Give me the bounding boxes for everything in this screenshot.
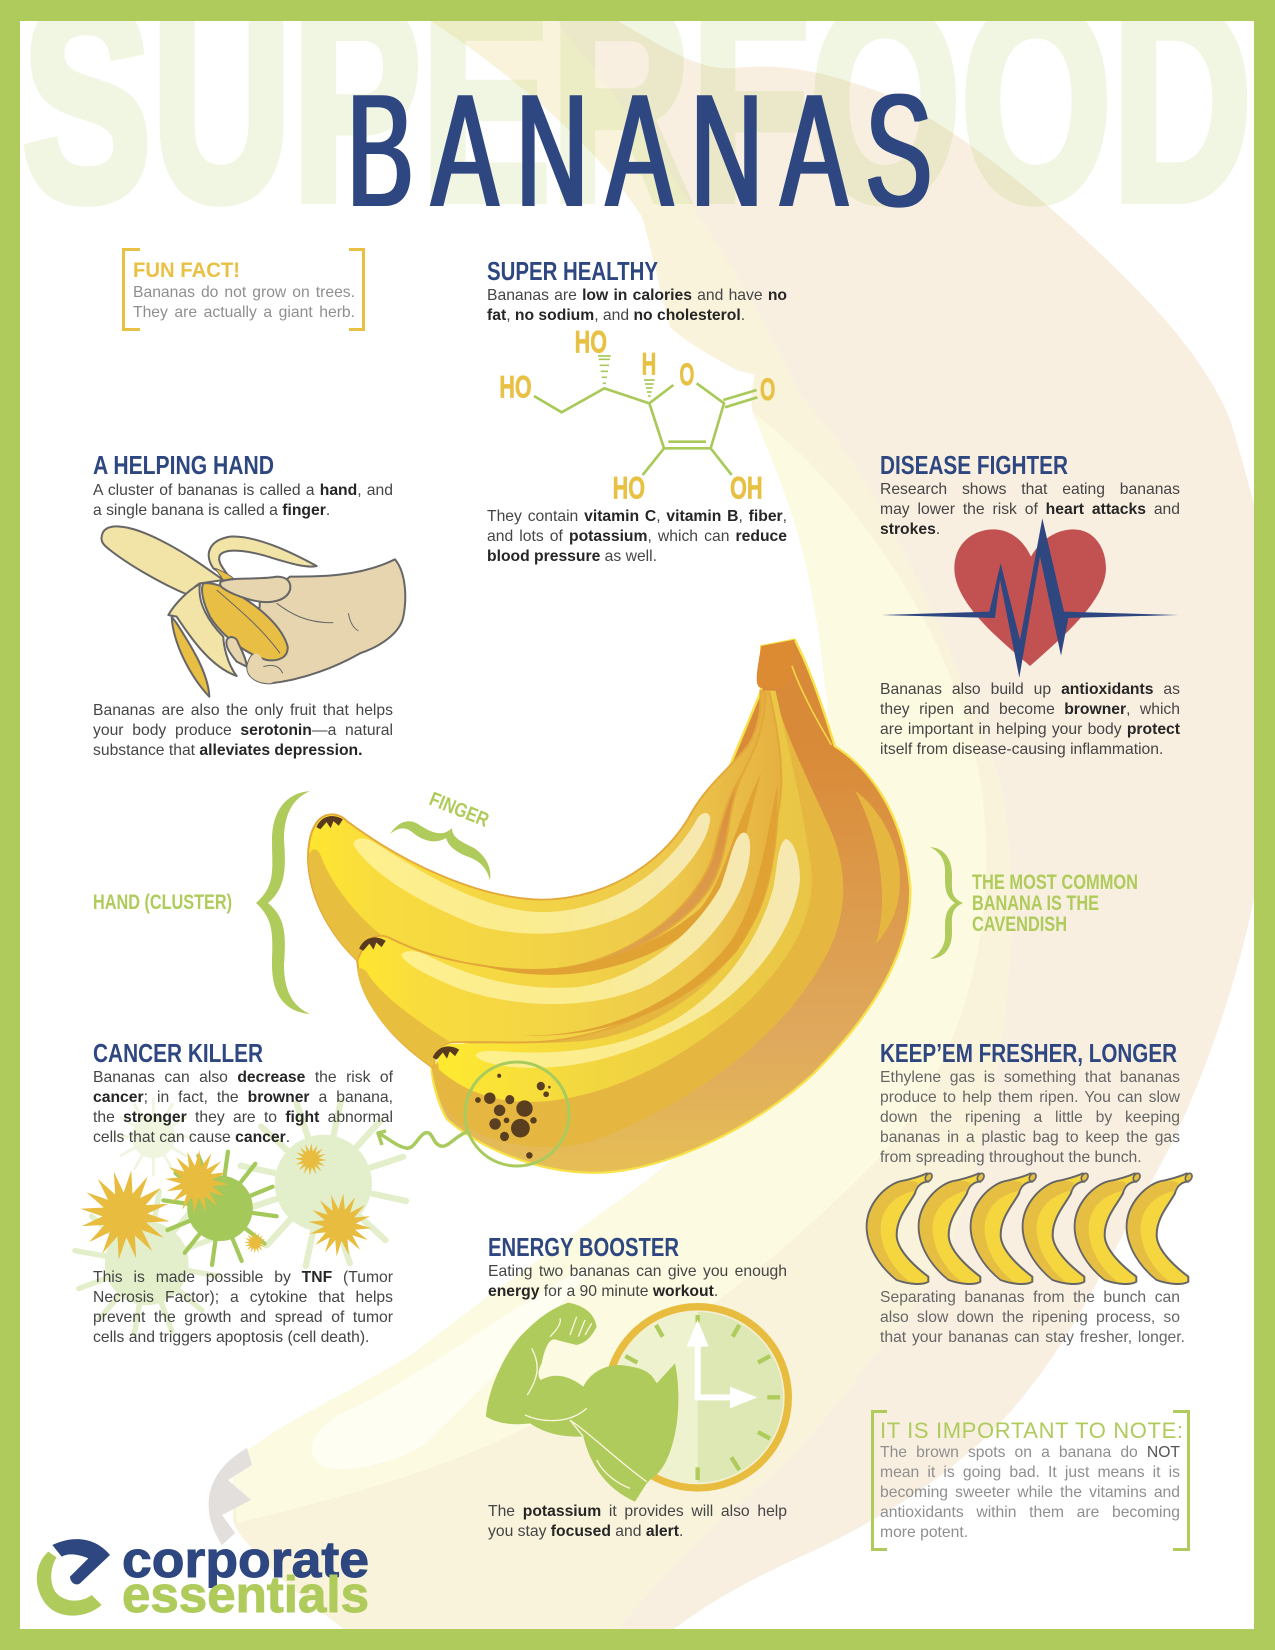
panel: keep'em fresher, longer: produce to help them ripen. You can slow xyxy=(880,1089,1180,1106)
logo: corporate essentials: essentials xyxy=(122,1566,369,1623)
panel: cancer killer xyxy=(72,1038,410,1346)
panel: disease fighter xyxy=(880,450,1180,758)
label: finger xyxy=(390,790,492,880)
panel: energy booster: The potassium it provides will also help xyxy=(488,1503,787,1520)
icon: flexed arm and clock xyxy=(486,1303,788,1502)
panel: fun fact xyxy=(122,248,365,331)
panel: keep'em fresher, longer: from spreading throughout the bunch. xyxy=(880,1149,1142,1166)
panel: energy booster: you stay focused and alert. xyxy=(488,1523,683,1540)
panel: super healthy: They contain vitamin C, vitamin B, fiber, xyxy=(487,508,787,525)
chemical structure: vitamin C: O xyxy=(760,371,775,407)
panel: keep'em fresher, longer: Separating bananas from the bunch can xyxy=(880,1289,1180,1306)
label: cavendish: CAVENDISH xyxy=(972,913,1067,936)
panel: keep'em fresher, longer: KEEP’EM FRESHER, LONGER xyxy=(880,1038,1177,1068)
panel: disease fighter: Research shows that eating bananas xyxy=(880,481,1180,498)
panel: disease fighter: strokes. xyxy=(880,521,940,538)
panel: a helping hand: substance that alleviates depression. xyxy=(93,742,362,759)
chemical structure: vitamin C xyxy=(499,323,775,505)
panel: important note xyxy=(871,1410,1190,1551)
panel: cancer killer: Bananas can also decrease the risk of xyxy=(93,1069,393,1086)
panel: cancer killer: This is made possible by TNF (Tumor xyxy=(93,1269,393,1286)
panel: keep'em fresher, longer xyxy=(866,1038,1193,1346)
panel: cancer killer: cells and triggers apoptosis (cell death). xyxy=(93,1329,369,1346)
panel: energy booster: ENERGY BOOSTER xyxy=(488,1232,679,1262)
panel: cancer killer: Necrosis Factor); a cytokine that helps xyxy=(93,1289,393,1306)
panel: a helping hand: Bananas are also the only fruit that helps xyxy=(93,702,393,719)
callout: brown spot magnifier with arrow xyxy=(376,1060,570,1168)
panel: important note: mean it is going bad. It just means it is xyxy=(880,1464,1180,1481)
panel: keep'em fresher, longer: down the ripening a little by keeping xyxy=(880,1109,1180,1126)
panel: fun fact: Bananas do not grow on trees. xyxy=(133,284,355,301)
panel: energy booster: energy for a 90 minute workout. xyxy=(488,1283,718,1300)
panel: energy booster: Eating two bananas can give you enough xyxy=(488,1263,787,1280)
chemical structure: vitamin C: OH xyxy=(730,469,763,505)
chemical structure: vitamin C: HO xyxy=(575,323,607,359)
panel: important note: The brown spots on a banana do NOT xyxy=(880,1444,1180,1461)
chemical structure: vitamin C: HO xyxy=(613,469,645,505)
chemical structure: vitamin C: HO xyxy=(499,368,532,404)
panel: super healthy: SUPER HEALTHY xyxy=(487,256,658,286)
logo: corporate essentials xyxy=(36,1531,369,1623)
panel: disease fighter: may lower the risk of heart attacks and xyxy=(880,501,1180,518)
panel: super healthy: and lots of potassium, which can reduce xyxy=(487,528,787,545)
main banana bunch illustration xyxy=(307,638,912,1174)
panel: energy booster xyxy=(486,1232,792,1540)
panel: cancer killer: CANCER KILLER xyxy=(93,1038,263,1068)
panel: a helping hand: a single banana is called a finger. xyxy=(93,502,330,519)
panel: cancer killer: cancer; in fact, the browner a banana, xyxy=(93,1089,393,1106)
panel: disease fighter: are important in helping your body protect xyxy=(880,721,1180,738)
panel: keep'em fresher, longer: that your bananas can stay fresher, longer. xyxy=(880,1329,1185,1346)
panel: important note: IT IS IMPORTANT TO NOTE: xyxy=(880,1418,1183,1443)
panel: disease fighter: they ripen and become browner, which xyxy=(880,701,1180,718)
icon: heart with heartbeat line xyxy=(882,518,1178,678)
panel: fun fact: FUN FACT! xyxy=(133,259,240,282)
panel: super healthy: fat, no sodium, and no cholesterol. xyxy=(487,307,745,324)
chemical structure: vitamin C: H xyxy=(642,345,656,381)
icon: row of six bananas xyxy=(867,1172,1193,1284)
panel: a helping hand: A cluster of bananas is called a hand, and xyxy=(93,482,393,499)
panel: super healthy: Bananas are low in calories and have no xyxy=(487,287,787,304)
panel: super healthy xyxy=(487,256,787,565)
label: cavendish: BANANA IS THE xyxy=(972,892,1099,915)
panel: a helping hand: A HELPING HAND xyxy=(93,450,274,480)
label: hand cluster: HAND (CLUSTER) xyxy=(93,891,232,914)
panel: super healthy: blood pressure as well. xyxy=(487,548,657,565)
chemical structure: vitamin C: O xyxy=(679,356,694,392)
panel: important note: becoming sweeter while the vitamins and xyxy=(880,1484,1180,1501)
label: cavendish xyxy=(930,847,1138,959)
panel: disease fighter: DISEASE FIGHTER xyxy=(880,450,1068,480)
panel: important note: antioxidants within them are becoming xyxy=(880,1504,1180,1521)
panel: a helping hand: your body produce serotonin—a natural xyxy=(93,722,393,739)
panel: disease fighter: Bananas also build up antioxidants as xyxy=(880,681,1180,698)
panel: cancer killer: prevent the growth and spread of tumor xyxy=(93,1309,393,1326)
logo: corporate essentials: corporate xyxy=(122,1531,369,1588)
panel: a helping hand xyxy=(93,450,406,759)
icon: hand peeling a banana xyxy=(101,526,405,697)
panel: keep'em fresher, longer: also slow down the ripening process, so xyxy=(880,1309,1180,1326)
panel: fun fact: They are actually a giant herb. xyxy=(133,304,355,321)
label: hand cluster xyxy=(93,791,310,1014)
panel: disease fighter: itself from disease-causing inflammation. xyxy=(880,741,1163,758)
icon: tumor cells and starbursts xyxy=(62,1083,424,1348)
panel: important note: more potent. xyxy=(880,1524,968,1541)
panel: cancer killer: cells that can cause cancer. xyxy=(93,1129,290,1146)
panel: cancer killer: the stronger they are to fight abnormal xyxy=(93,1109,393,1126)
panel: keep'em fresher, longer: bananas in a plastic bag to keep the gas xyxy=(880,1129,1180,1146)
panel: keep'em fresher, longer: Ethylene gas is something that bananas xyxy=(880,1069,1180,1086)
